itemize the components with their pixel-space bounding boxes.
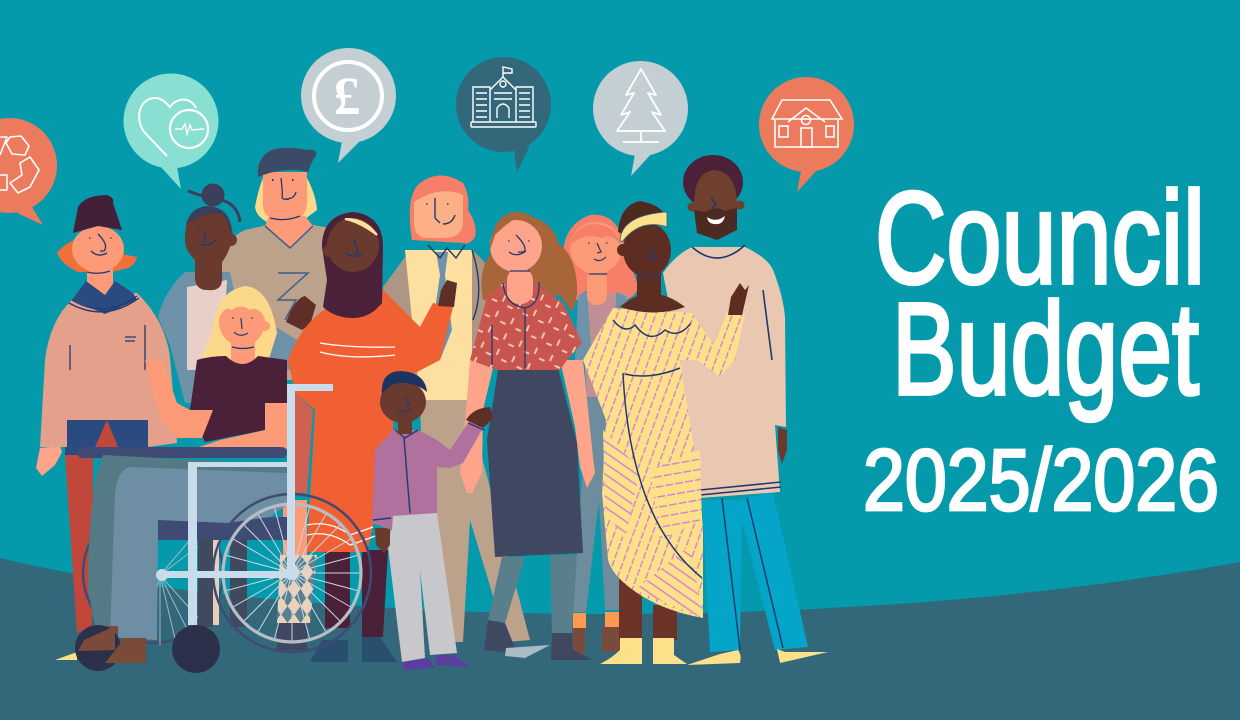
seat (158, 517, 287, 540)
speech bubble: money (301, 48, 396, 163)
person: child in purple shirt (372, 371, 493, 670)
shoes (78, 626, 146, 663)
chair frame (164, 384, 333, 625)
person: woman with ginger hair (563, 215, 638, 653)
ground (0, 558, 1240, 720)
speech bubble: health (124, 74, 218, 189)
yellow shoe of standing man (55, 652, 77, 660)
wheelchair and seated woman (55, 286, 371, 673)
seated woman neck and face (219, 296, 270, 367)
speech bubble: environment (593, 61, 688, 176)
person: woman in red blouse and dark skirt (460, 212, 595, 660)
speech bubble: money: £ (334, 66, 360, 126)
wheel hubs and castors (75, 566, 299, 673)
person: man in pink sweater and red trousers (36, 195, 177, 633)
armrest (77, 447, 287, 458)
speech bubble: recycling (0, 118, 57, 225)
person: woman with top knot and blue jacket (158, 184, 316, 403)
speech bubble: school (456, 57, 551, 172)
person: bearded man in turban and beige sweater (663, 155, 828, 665)
person: woman in hijab and orange dress (288, 212, 457, 662)
seated woman black top (190, 356, 287, 442)
rear leg (198, 540, 247, 627)
front wheel (213, 494, 371, 652)
speech bubble: housing (759, 77, 854, 192)
light thigh (110, 467, 287, 640)
dark thigh (88, 455, 290, 640)
seated woman hair (200, 286, 277, 362)
person: man in beanie and tan shirt (220, 148, 330, 380)
person: man with shirt and tie (383, 176, 530, 642)
lower leg and sock (277, 500, 317, 650)
rear wheel (83, 503, 223, 645)
title: Council Budget (875, 164, 1205, 422)
person: woman in yellow patterned dress (583, 201, 749, 664)
seated woman arms (145, 360, 287, 453)
